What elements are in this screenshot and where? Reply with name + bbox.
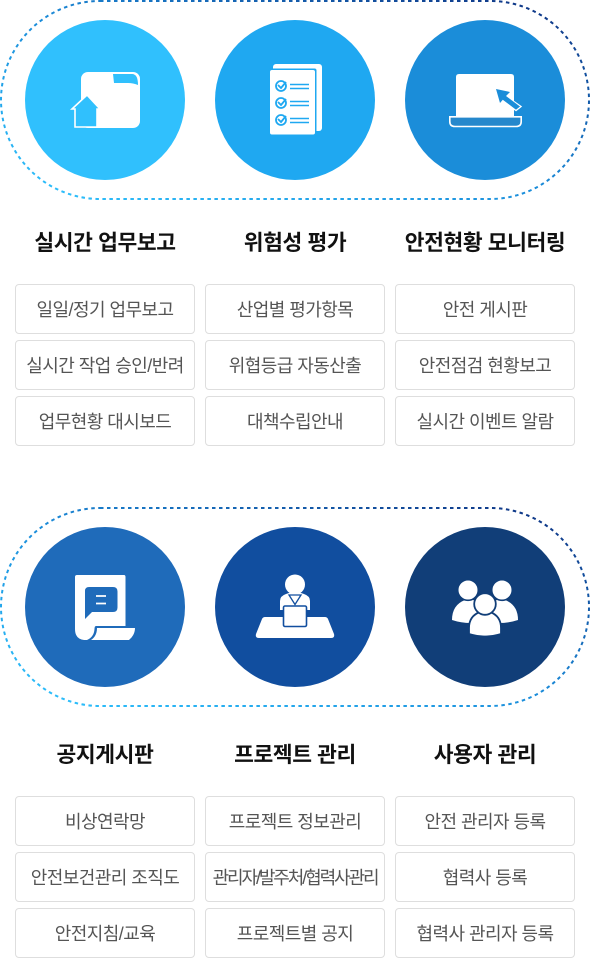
item: 위협등급 자동산출 — [229, 356, 361, 376]
item — [395, 284, 575, 334]
item — [205, 340, 385, 390]
item: 안전지침/교육 — [55, 924, 155, 944]
item — [15, 340, 195, 390]
heading: user management: 사용자 관리 — [434, 743, 536, 767]
icon: person at desk — [215, 527, 375, 687]
item — [205, 396, 385, 446]
item — [15, 796, 195, 846]
heading: risk assessment: 위험성 평가 — [244, 231, 346, 255]
item — [205, 796, 385, 846]
heading: safety monitoring: 안전현황 모니터링 — [405, 231, 565, 255]
item: 산업별 평가항목 — [237, 300, 353, 320]
dashed ring: top group — [1, 1, 589, 199]
item: 프로젝트 정보관리 — [229, 812, 361, 832]
icon: folder with house — [25, 20, 185, 180]
item: 일일/정기 업무보고 — [36, 300, 173, 320]
item — [15, 908, 195, 958]
icon: document with speech bubble — [25, 527, 185, 687]
dashed ring: bottom group — [1, 508, 589, 706]
item — [15, 284, 195, 334]
item — [205, 284, 385, 334]
item — [205, 852, 385, 902]
item: 실시간 작업 승인/반려 — [26, 356, 184, 376]
item: 대책수립안내 — [247, 412, 343, 432]
item: 프로젝트별 공지 — [237, 924, 353, 944]
item — [15, 852, 195, 902]
icon: checklist — [215, 20, 375, 180]
item: 업무현황 대시보드 — [39, 412, 171, 432]
item — [395, 396, 575, 446]
item — [395, 908, 575, 958]
item: 안전 게시판 — [443, 300, 527, 320]
item — [15, 396, 195, 446]
item: 안전 관리자 등록 — [424, 812, 545, 832]
item — [205, 908, 385, 958]
heading: notice board: 공지게시판 — [57, 743, 153, 767]
item: 협력사 관리자 등록 — [416, 924, 553, 944]
item: 안전점검 현황보고 — [419, 356, 551, 376]
item: 협력사 등록 — [443, 868, 527, 888]
item — [395, 340, 575, 390]
icon: user group — [405, 527, 565, 687]
icon: laptop with cursor — [405, 20, 565, 180]
heading: project management: 프로젝트 관리 — [234, 743, 356, 767]
heading: realtime report: 실시간 업무보고 — [34, 231, 176, 255]
item: 관리자/발주처/협력사관리 — [213, 868, 377, 888]
item — [395, 852, 575, 902]
item: 비상연락망 — [65, 812, 145, 832]
item: 안전보건관리 조직도 — [31, 868, 179, 888]
item — [395, 796, 575, 846]
item: 실시간 이벤트 알람 — [416, 412, 553, 432]
